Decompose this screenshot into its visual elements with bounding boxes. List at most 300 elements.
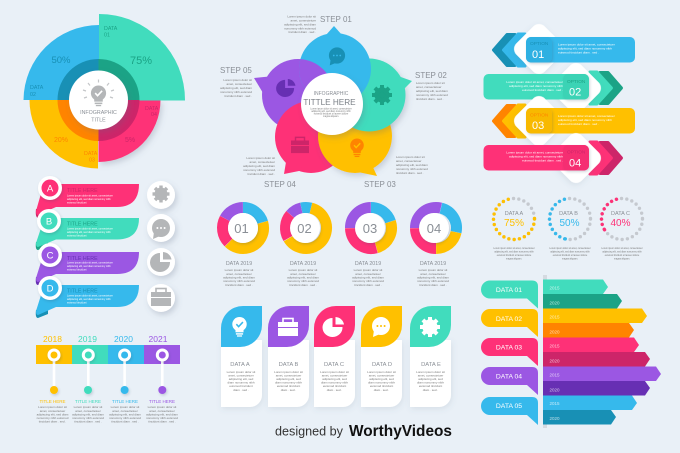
center circle — [301, 73, 363, 135]
step 03 text: adipiscing elit, sed diam — [396, 163, 428, 167]
donut 01 caption: nonummy nibh euismod — [223, 279, 255, 283]
donut 01 caption: amet, consectetuer — [226, 272, 252, 276]
ribbon B: B — [46, 216, 52, 228]
ribbon A — [36, 176, 139, 218]
step labels: STEP 04 — [264, 180, 296, 189]
label: DATA 05: DATA 05 — [496, 403, 522, 410]
ring B text — [549, 247, 591, 260]
bar year labels — [550, 286, 560, 421]
donut 01: 01 — [234, 221, 249, 236]
year 2021: 2021 — [149, 334, 168, 344]
card B: diam . sed . — [281, 388, 296, 392]
dotted progress rings — [493, 191, 650, 260]
donut 03 caption: adipiscing elit, sed diam — [352, 276, 384, 280]
card A: Lorem ipsum dolor sit — [227, 370, 256, 374]
donut 04 caption: amet, consectetuer — [420, 272, 446, 276]
card C: euismod tincidunt — [323, 384, 346, 388]
step 03 text: amet, consectetuer — [396, 159, 422, 163]
step 05 bubble — [254, 59, 334, 131]
pie segment: yellow 20% — [30, 100, 98, 168]
ribbon B: Lorem ipsum dolor sit amet, consectetuer — [67, 228, 113, 230]
timeline text 2021: tincidunt diam . sed . — [148, 420, 176, 424]
option 03: Lorem ipsum dolor sit amet, consectetuer — [558, 114, 615, 118]
step labels: STEP 01 — [320, 15, 352, 24]
footer credit: designed by — [275, 424, 343, 438]
icon circle: pie — [147, 248, 175, 276]
step 01 text: amet, consectetuer — [290, 18, 316, 22]
label: DATA 05 — [481, 397, 538, 425]
card B: diam nonummy nibh — [275, 380, 302, 384]
bar year labels: 2020 — [550, 300, 560, 306]
timeline text 2018: nonummy nibh euismod — [37, 416, 69, 420]
timeline text 2019: tincidunt diam . sed . — [74, 420, 102, 424]
card C: DATA C — [324, 362, 344, 368]
icon: light bulb — [83, 80, 114, 106]
card B: adipiscing elit, sed — [276, 377, 301, 381]
timeline text 2021: Lorem ipsum dolor sit — [148, 405, 176, 409]
timeline text 2018: tincidunt diam . sed . — [39, 420, 66, 424]
ring B text: Lorem ipsum dolor sit amet, consectetuer — [549, 247, 591, 250]
timeline text 2021: TITLE HERE — [149, 399, 175, 404]
card B: Lorem ipsum dolor sit — [274, 370, 303, 374]
donut 04 caption: DATA 2019 — [420, 261, 446, 267]
step 02 text — [416, 81, 448, 101]
ribbon D: Lorem ipsum dolor sit amet, consectetuer — [67, 294, 113, 298]
option banners — [484, 21, 635, 186]
ribbon D: adipiscing elit, sed diam nonummy nibh — [67, 298, 111, 301]
option 01: euismod tincidunt diam . sed . — [558, 50, 599, 54]
donut 03 — [345, 202, 397, 254]
step 04 text — [243, 156, 275, 176]
ring A 75%: DATA A — [505, 211, 524, 217]
step 04 text: amet, consectetuer — [249, 160, 275, 164]
ring A text: adipiscing elit, sed diam nonummy nibh — [494, 250, 534, 254]
icon: bulb — [350, 138, 364, 157]
option 02: euismod tincidunt diam . sed . — [522, 88, 563, 92]
step 02 text: Lorem ipsum dolor sit — [416, 81, 445, 85]
label: DATA 04 — [481, 367, 538, 395]
step 01 text — [284, 14, 316, 34]
ribbon list — [36, 176, 175, 318]
option 02: adipiscing elit, sed diam nonummy nibh — [509, 84, 563, 88]
ring B 50%: 50% — [559, 218, 580, 229]
ring B text: adipiscing elit, sed diam nonummy nibh — [550, 250, 590, 254]
pie labels: 01 — [104, 32, 110, 38]
year 2020: 2020 — [114, 334, 133, 344]
ribbon C — [36, 243, 139, 285]
option 03: OPTION — [530, 112, 549, 118]
milestone 2021 — [157, 350, 167, 394]
ribbon C: adipiscing elit, sed diam nonummy nibh — [67, 265, 111, 268]
card E: diam . sed . — [423, 388, 438, 392]
card D: amet, consectetuer — [369, 374, 394, 378]
step 01 text: Lorem ipsum dolor sit — [287, 14, 316, 18]
ribbon B: adipiscing elit, sed diam nonummy nibh — [67, 231, 111, 234]
pie labels — [30, 26, 159, 164]
center heading: INFOGRAPHIC — [314, 91, 349, 97]
step 01 text: adipiscing elit, sed diam — [284, 22, 316, 26]
timeline text 2020: TITLE HERE — [112, 399, 138, 404]
pie labels: 75% — [130, 55, 152, 67]
pie labels: 50% — [51, 55, 71, 66]
timeline text 2018: Lorem ipsum dolor sit — [38, 405, 67, 409]
donut 04 caption: Lorem ipsum dolor sit — [419, 268, 448, 272]
timeline text 2018: TITLE HERE — [39, 399, 66, 404]
step 01 text: nonummy nibh euismod — [284, 26, 316, 30]
card E: diam nonummy nibh — [417, 380, 444, 384]
option 01: adipiscing elit, sed diam nonummy nibh — [558, 46, 612, 50]
label: DATA 03 — [481, 338, 538, 366]
arrow bar chart — [481, 275, 661, 428]
ribbon B: euismod tincidunt — [67, 234, 87, 238]
footer credit — [275, 423, 452, 440]
step flower diagram: TITTLE HERE — [303, 98, 356, 107]
donut 03 caption: Lorem ipsum dolor sit — [354, 268, 382, 272]
card A: euismod tincidunt — [229, 384, 253, 388]
ring C 40% — [594, 191, 650, 247]
radial pie chart — [24, 14, 185, 168]
donut 02: 02 — [297, 221, 312, 236]
timeline text 2018 — [37, 399, 69, 424]
donut 03: 03 — [363, 221, 377, 236]
ring C text: Lorem ipsum dolor sit amet, consectetuer — [601, 247, 643, 250]
ring B 50%: DATA B — [559, 211, 578, 217]
donut 02 caption: nonummy nibh euismod — [287, 279, 319, 283]
card E: DATA E — [421, 362, 441, 368]
pie labels: DATA — [84, 151, 98, 157]
milestone 2020 — [120, 350, 130, 394]
center text: adipiscing elit, sed diam nonummy nibh — [311, 110, 351, 113]
ring C text: magna aliquam. — [614, 258, 630, 260]
ribbon A: Lorem ipsum dolor sit amet, consectetuer — [67, 194, 113, 198]
purple overlap on blue — [299, 59, 327, 89]
ring A text: magna aliquam. — [506, 258, 522, 260]
option 01: Lorem ipsum dolor sit amet, consectetuer — [558, 42, 615, 46]
timeline text 2021: adipiscing elit, sed diam — [146, 412, 178, 416]
pie labels: 02 — [30, 92, 36, 98]
timeline text 2020: Lorem ipsum dolor sit — [111, 405, 140, 409]
bar year labels: 2020 — [550, 416, 560, 421]
timeline text 2019: nonummy nibh euismod — [72, 416, 104, 420]
ribbon C: TITLE HERE — [67, 256, 98, 262]
step 02 text: amet, consectetuer — [416, 85, 442, 89]
step 04 text: Lorem ipsum dolor sit — [246, 156, 275, 160]
timeline text 2019: amet, consectetuer — [75, 409, 101, 413]
donut 02 caption: tincidunt diam . sed . — [289, 283, 317, 287]
ribbon C: C — [47, 250, 54, 262]
donut 02 caption: DATA 2019 — [290, 261, 316, 267]
bars — [543, 280, 661, 424]
card B: euismod tincidunt — [277, 384, 300, 388]
pie segment: pink 5% — [98, 100, 160, 162]
card A — [221, 306, 262, 407]
radial pie chart: TITLE — [91, 118, 106, 124]
step 03 bubble — [318, 99, 392, 176]
donut 02 — [277, 199, 335, 257]
step 05 text: Lorem ipsum dolor sit — [223, 78, 252, 82]
option 04: Lorem ipsum dolor sit amet, consectetuer — [506, 150, 563, 154]
card A: diam nonummy nibh — [227, 380, 255, 384]
card C — [314, 306, 355, 407]
step labels: STEP 03 — [364, 180, 396, 189]
option 02: OPTION — [567, 79, 586, 85]
label: DATA 01 — [481, 280, 538, 308]
bar year labels: 2015 — [550, 286, 560, 290]
year 2018: 2018 — [43, 334, 62, 344]
donut 04 caption — [417, 261, 449, 287]
ribbon D: TITLE HERE — [67, 288, 98, 294]
option 02 — [484, 60, 622, 116]
bar year labels: 2020 — [550, 358, 560, 364]
pie segment: teal 75% — [99, 14, 185, 100]
donut 01 caption: adipiscing elit, sed diam — [223, 276, 255, 280]
bar year labels: 2015 — [550, 401, 560, 406]
inner ring — [58, 59, 140, 141]
center text: euismod tincidunt ut laoreet dolore — [314, 112, 349, 116]
timeline bar — [36, 345, 180, 364]
card B: amet, consectetuer — [276, 374, 301, 378]
ribbon A: adipiscing elit, sed diam nonummy nibh — [67, 198, 111, 201]
donut 01 caption: Lorem ipsum dolor sit — [225, 268, 254, 272]
step 05 text: amet, consectetuer — [226, 82, 252, 86]
timeline text 2018: adipiscing elit, sed diam — [37, 412, 69, 416]
timeline text 2018: amet, consectetuer — [40, 409, 65, 413]
data cards — [221, 306, 451, 407]
card C: diam nonummy nibh — [321, 380, 348, 384]
card D: diam . sed . — [374, 388, 389, 392]
step labels — [220, 15, 447, 189]
label: DATA 01: DATA 01 — [496, 287, 522, 294]
card D: diam nonummy nibh — [368, 380, 395, 384]
ribbon B: TITLE HERE — [67, 222, 98, 228]
label: DATA 02: DATA 02 — [496, 316, 522, 323]
ring C 40%: DATA C — [611, 211, 630, 217]
card E — [410, 306, 451, 407]
ribbon A: euismod tincidunt — [67, 202, 87, 204]
step 03 text: tincidunt diam . sed . — [396, 171, 424, 175]
ribbon A: A — [47, 184, 54, 194]
pie labels: 03 — [89, 158, 95, 164]
donut 03 caption — [352, 261, 384, 287]
ribbon B — [36, 209, 139, 250]
icon: pie — [276, 79, 295, 97]
bar year labels: 2020 — [550, 388, 560, 392]
donut 01 caption: tincidunt diam . sed . — [225, 283, 253, 287]
timeline text 2019: adipiscing elit, sed diam — [72, 412, 104, 416]
option 02: 02 — [569, 86, 581, 98]
card D — [361, 306, 402, 407]
step 04 text: tincidunt diam . sed . — [247, 172, 275, 176]
milestone 2019 — [83, 350, 93, 394]
ring A text: Lorem ipsum dolor sit amet, consectetuer — [493, 247, 535, 250]
pie labels: 20% — [54, 137, 68, 144]
bar year labels: 2020 — [550, 330, 560, 334]
ring B text: magna aliquam. — [562, 258, 578, 260]
card C: amet, consectetuer — [322, 374, 347, 378]
donut 02 caption: adipiscing elit, sed diam — [287, 276, 319, 280]
card B — [268, 306, 309, 407]
option 03: euismod tincidunt diam . sed . — [558, 122, 599, 126]
bar year labels: 2015 — [550, 372, 560, 378]
step flower diagram — [220, 14, 448, 189]
ribbon C: Lorem ipsum dolor sit amet, consectetuer — [67, 262, 113, 264]
step 04 text: adipiscing elit, sed diam — [243, 164, 275, 168]
donut 04 caption: adipiscing elit, sed diam — [417, 276, 449, 280]
card E: Lorem ipsum dolor sit — [416, 370, 445, 374]
ribbon D: euismod tincidunt — [67, 302, 87, 304]
card E: euismod tincidunt — [419, 384, 442, 388]
step 02 text: adipiscing elit, sed diam — [416, 89, 448, 93]
pie segment: blue 50% — [24, 25, 99, 100]
step labels: STEP 05 — [220, 66, 252, 75]
ring B text: euismod tincidunt ut laoreet dolore — [553, 254, 588, 257]
card A: adipiscing elit, sed — [229, 377, 254, 381]
donut 04 — [411, 203, 461, 253]
card D: adipiscing elit, sed — [369, 377, 394, 381]
card A: diam . sed . — [233, 388, 249, 392]
donut 02 caption: Lorem ipsum dolor sit — [289, 268, 318, 272]
donut 03 caption: DATA 2019 — [355, 261, 381, 267]
center disc — [69, 70, 128, 130]
card A: DATA A — [230, 362, 250, 368]
card E: amet, consectetuer — [418, 374, 443, 378]
donut 01 caption — [223, 261, 255, 287]
label: DATA 02 — [481, 309, 538, 337]
year 2019: 2019 — [78, 334, 97, 344]
timeline text 2020 — [109, 399, 141, 424]
timeline text 2020: adipiscing elit, sed diam — [109, 412, 141, 416]
timeline text 2021: amet, consectetuer — [149, 409, 175, 413]
icon circle: chat — [147, 214, 175, 242]
ring A 75%: 75% — [504, 218, 524, 229]
card B: DATA B — [279, 362, 299, 368]
option 03: 03 — [532, 120, 544, 132]
ring A 75% — [494, 198, 534, 240]
timeline text 2019: TITLE HERE — [75, 399, 101, 404]
step 05 text: adipiscing elit, sed diam — [220, 86, 252, 90]
step 03 text: Lorem ipsum dolor sit — [396, 155, 425, 159]
option 01: OPTION — [530, 41, 549, 47]
ring A text — [493, 247, 535, 260]
donut 03 caption: nonummy nibh euismod — [352, 279, 384, 283]
pie labels: DATA — [104, 26, 118, 32]
icon circle: gear — [147, 181, 175, 209]
bar year labels: 2015 — [550, 314, 560, 320]
timeline — [36, 334, 180, 424]
timeline text 2019 — [72, 399, 104, 424]
step labels: STEP 02 — [415, 71, 447, 80]
ring B 50% — [545, 194, 595, 244]
ribbon D: D — [47, 284, 54, 294]
step 02 text: nonummy nibh euismod — [416, 93, 448, 97]
ring C text — [601, 247, 643, 260]
step 04 bubble — [275, 101, 347, 174]
timeline text 2019: Lorem ipsum dolor sit — [74, 405, 102, 409]
timeline text 2021 — [146, 399, 178, 424]
milestone 2018 — [49, 350, 59, 394]
ring A text: euismod tincidunt ut laoreet dolore — [497, 254, 532, 257]
option 04 — [484, 130, 622, 186]
center text: Lorem ipsum dolor sit amet, consectetuer — [310, 108, 352, 110]
icon: briefcase — [291, 137, 309, 153]
option 03: adipiscing elit, sed diam nonummy nibh — [558, 118, 612, 122]
option 01 — [494, 21, 635, 77]
pie labels: DATA — [30, 85, 44, 91]
footer credit: WorthyVideos — [349, 423, 452, 440]
label: DATA 04: DATA 04 — [496, 374, 522, 380]
ring C text: adipiscing elit, sed diam nonummy nibh — [602, 250, 642, 254]
option 04: euismod tincidunt diam . sed . — [522, 158, 563, 162]
donut 02 caption: amet, consectetuer — [290, 272, 316, 276]
option 04: OPTION — [567, 150, 586, 156]
timeline text 2020: nonummy nibh euismod — [109, 416, 141, 420]
donut 01 caption: DATA 2019 — [226, 261, 252, 267]
chart axis — [543, 275, 547, 428]
step 03 text — [396, 155, 428, 175]
donut 04 caption: nonummy nibh euismod — [417, 279, 449, 283]
center text — [310, 108, 352, 118]
ring C text: euismod tincidunt ut laoreet dolore — [605, 254, 640, 257]
pie labels: 5% — [125, 137, 135, 144]
option 03 — [494, 93, 635, 149]
card D: euismod tincidunt — [370, 384, 393, 388]
donut charts — [214, 199, 461, 287]
ring C 40%: 40% — [610, 218, 631, 229]
step 02 bubble — [332, 58, 412, 132]
label: DATA 03: DATA 03 — [496, 344, 522, 352]
card E: adipiscing elit, sed — [418, 377, 443, 381]
ribbon C: euismod tincidunt — [67, 268, 87, 272]
option 02: Lorem ipsum dolor sit amet, consectetuer — [506, 80, 563, 84]
step 03 text: nonummy nibh euismod — [396, 167, 428, 171]
pie labels: DATA — [145, 106, 159, 112]
center title: INFOGRAPHIC — [80, 110, 117, 116]
option 01: 01 — [532, 49, 544, 61]
icon: chat — [329, 47, 345, 65]
pie labels: 04 — [151, 112, 157, 118]
step 05 text — [220, 78, 252, 98]
icon: gear — [372, 85, 392, 105]
card A: amet, consectetuer — [228, 374, 254, 378]
donut 04 caption: tincidunt diam . sed . — [419, 283, 447, 287]
bar year labels: 2015 — [550, 344, 560, 348]
step 05 text: tincidunt diam . sed . — [224, 94, 252, 98]
step 05 text: nonummy nibh euismod — [220, 90, 252, 94]
donut 01 — [214, 199, 272, 257]
timeline text 2021: nonummy nibh euismod — [146, 416, 178, 420]
card C: adipiscing elit, sed — [322, 377, 347, 381]
timeline text 2020: tincidunt diam . sed . — [111, 420, 139, 424]
center text: magna aliquam. — [323, 116, 339, 118]
icon circle: briefcase — [147, 284, 175, 312]
donut 03 caption: tincidunt diam . sed . — [354, 283, 382, 287]
donut 02 caption — [287, 261, 319, 287]
option 04: 04 — [569, 158, 581, 170]
donut 04: 04 — [427, 221, 441, 236]
card C: Lorem ipsum dolor sit — [320, 370, 349, 374]
card D: Lorem ipsum dolor sit — [367, 370, 396, 374]
step 04 text: nonummy nibh euismod — [243, 168, 275, 172]
card D: DATA D — [372, 362, 392, 368]
ribbon A: TITLE HERE — [67, 188, 98, 194]
donut 03 caption: amet, consectetuer — [355, 272, 381, 276]
step 01 bubble — [299, 26, 371, 105]
step 02 text: tincidunt diam . sed . — [416, 97, 444, 101]
timeline text 2020: amet, consectetuer — [112, 409, 138, 413]
ribbon D — [36, 276, 139, 318]
option 04: adipiscing elit, sed diam nonummy nibh — [509, 154, 563, 158]
step 01 text: tincidunt diam . sed . — [288, 30, 316, 34]
